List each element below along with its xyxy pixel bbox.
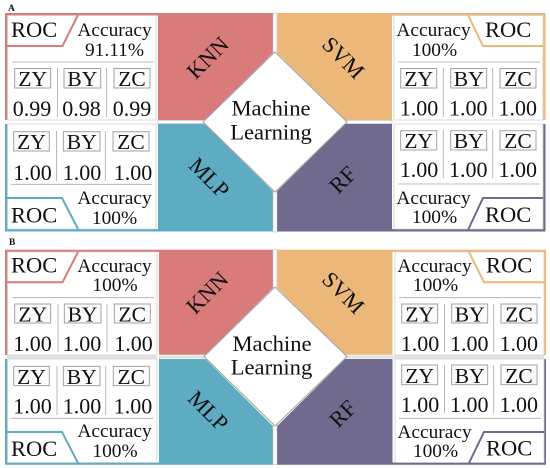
accuracy: [396, 20, 471, 61]
metrics panel: RF: 1.00: [498, 157, 537, 182]
accuracy: [397, 256, 472, 296]
ROC tab: [468, 15, 543, 46]
divider bar: [7, 355, 157, 359]
metrics panel: SVM: BY: [455, 302, 485, 326]
accuracy: 100%: [92, 208, 137, 229]
metrics panel: MLP: BY: [67, 130, 97, 154]
metrics panel: KNN: 0.99: [13, 96, 51, 121]
model sector: RF: [277, 124, 546, 232]
metrics panel: MLP: ZY: [17, 365, 46, 389]
metrics panel: RF: ZY: [405, 364, 434, 388]
center diamond: Machine Learning: Learning: [231, 354, 312, 380]
model sector: MLP: [5, 359, 273, 465]
metrics panel: SVM: 1.00: [400, 96, 438, 120]
metrics panel: KNN: ZY: [18, 67, 47, 91]
model sector: SVM: SVM: [317, 32, 369, 84]
metrics panel: SVM: ZC: [504, 67, 532, 91]
accuracy: [396, 188, 471, 228]
metrics panel: KNN: 1.00: [13, 331, 52, 356]
metrics panel: KNN: ZY: [18, 302, 47, 326]
panel A: [5, 13, 546, 232]
metrics panel: MLP: 1.00: [63, 160, 101, 185]
center diamond: Machine Learning: [203, 52, 347, 192]
metrics panel: RF: 1.00: [401, 392, 439, 417]
ROC tab: ROC: [11, 252, 57, 278]
center diamond: Machine Learning: Machine: [231, 96, 311, 120]
ROC tab: ROC: [486, 436, 532, 460]
ROC tab: [7, 15, 78, 46]
metrics panel: KNN: BY: [67, 67, 97, 91]
accuracy: [77, 188, 152, 229]
metrics panel: KNN: BY: [68, 302, 97, 326]
metrics panel: RF: ZC: [505, 364, 533, 388]
metrics panel: MLP: [7, 124, 156, 229]
center diamond: Machine Learning: Learning: [230, 120, 312, 144]
metrics panel: SVM: 1.00: [498, 96, 537, 120]
ROC tab: [7, 198, 78, 229]
metrics panel: KNN: 0.98: [62, 96, 101, 121]
model sector: KNN: [5, 13, 273, 120]
metrics panel: SVM: ZY: [404, 67, 433, 91]
ROC tab: ROC: [11, 202, 57, 228]
accuracy: 100%: [413, 275, 458, 296]
accuracy: Accuracy: [77, 256, 152, 277]
ROC tab: ROC: [485, 17, 531, 42]
accuracy: Accuracy: [397, 422, 472, 443]
metrics panel: KNN: [7, 15, 156, 121]
metrics panel: SVM: BY: [454, 67, 484, 91]
metrics panel: MLP: 1.00: [63, 394, 101, 418]
accuracy: Accuracy: [77, 188, 152, 209]
accuracy: 100%: [92, 441, 138, 462]
panel label A: A: [8, 4, 15, 14]
accuracy: 100%: [412, 40, 457, 61]
metrics panel: SVM: [395, 252, 544, 356]
accuracy: 100%: [413, 441, 458, 462]
ROC tab: [468, 198, 543, 230]
model sector: KNN: KNN: [181, 267, 233, 319]
metrics panel: SVM: 1.00: [401, 331, 439, 356]
model sector: MLP: MLP: [183, 386, 233, 436]
ROC tab: [7, 252, 78, 282]
metrics panel: KNN: 0.99: [113, 96, 151, 121]
divider bar right: [395, 355, 544, 359]
metrics panel: SVM: 1.00: [499, 331, 538, 356]
metrics panel: RF: [394, 124, 543, 230]
metrics panel: KNN: 1.00: [63, 331, 101, 356]
ROC tab: ROC: [11, 17, 57, 42]
accuracy: [77, 20, 152, 61]
model sector: RF: [277, 359, 546, 465]
metrics panel: RF: BY: [454, 129, 484, 153]
ROC tab: [469, 252, 544, 282]
model sector: KNN: [5, 250, 273, 355]
metrics panel: MLP: ZC: [117, 130, 145, 154]
ROC tab: ROC: [11, 436, 57, 461]
metrics panel: SVM: ZY: [405, 302, 434, 326]
model sector: RF: RF: [324, 395, 361, 432]
ROC tab: [7, 432, 78, 463]
metrics panel: MLP: ZC: [118, 365, 145, 389]
accuracy: [397, 422, 472, 462]
metrics panel: MLP: 1.00: [114, 394, 152, 418]
metrics panel: MLP: ZY: [17, 130, 46, 154]
metrics panel: RF: BY: [455, 364, 485, 388]
model sector: SVM: [277, 250, 546, 355]
metrics panel: RF: ZY: [404, 129, 433, 153]
metrics panel: MLP: [7, 359, 157, 463]
metrics panel: MLP: BY: [67, 365, 97, 389]
center diamond: Machine Learning: [204, 287, 347, 426]
divider bar center: [159, 356, 395, 358]
model sector: KNN: KNN: [182, 32, 234, 84]
accuracy: [77, 421, 152, 462]
ROC tab: ROC: [485, 202, 531, 227]
model sector: SVM: [277, 13, 546, 120]
model sector: SVM: SVM: [317, 267, 369, 319]
accuracy: Accuracy: [396, 188, 471, 209]
metrics panel: KNN: ZC: [119, 302, 146, 326]
model sector: RF: RF: [324, 161, 361, 198]
panel B: [5, 250, 546, 465]
metrics panel: SVM: ZC: [505, 302, 533, 326]
center diamond: Machine Learning: Machine: [232, 331, 312, 356]
accuracy: 100%: [412, 207, 457, 228]
accuracy: Accuracy: [397, 256, 472, 277]
metrics panel: MLP: 1.00: [114, 160, 152, 185]
metrics panel: RF: 1.00: [450, 392, 489, 417]
accuracy: Accuracy: [77, 421, 152, 442]
ROC tab: [469, 432, 544, 463]
metrics panel: RF: 1.00: [400, 157, 438, 182]
metrics panel: KNN: ZC: [118, 67, 146, 91]
metrics panel: KNN: 1.00: [114, 331, 153, 356]
accuracy: Accuracy: [77, 20, 152, 41]
accuracy: [77, 256, 152, 296]
metrics panel: RF: [395, 359, 544, 463]
metrics panel: SVM: 1.00: [449, 96, 488, 120]
metrics panel: MLP: 1.00: [13, 394, 52, 418]
metrics panel: KNN: [7, 252, 157, 356]
metrics panel: RF: 1.00: [449, 157, 488, 182]
model sector: MLP: [5, 124, 273, 232]
panel label B: B: [9, 238, 16, 248]
accuracy: 91.11%: [85, 40, 144, 61]
accuracy: Accuracy: [396, 20, 471, 41]
metrics panel: SVM: 1.00: [450, 331, 489, 356]
metrics panel: RF: 1.00: [499, 392, 538, 417]
accuracy: 100%: [92, 275, 138, 296]
ROC tab: ROC: [486, 252, 532, 278]
metrics panel: MLP: 1.00: [13, 160, 52, 185]
metrics panel: SVM: [394, 15, 543, 120]
metrics panel: RF: ZC: [504, 129, 532, 153]
model sector: MLP: MLP: [184, 153, 234, 203]
